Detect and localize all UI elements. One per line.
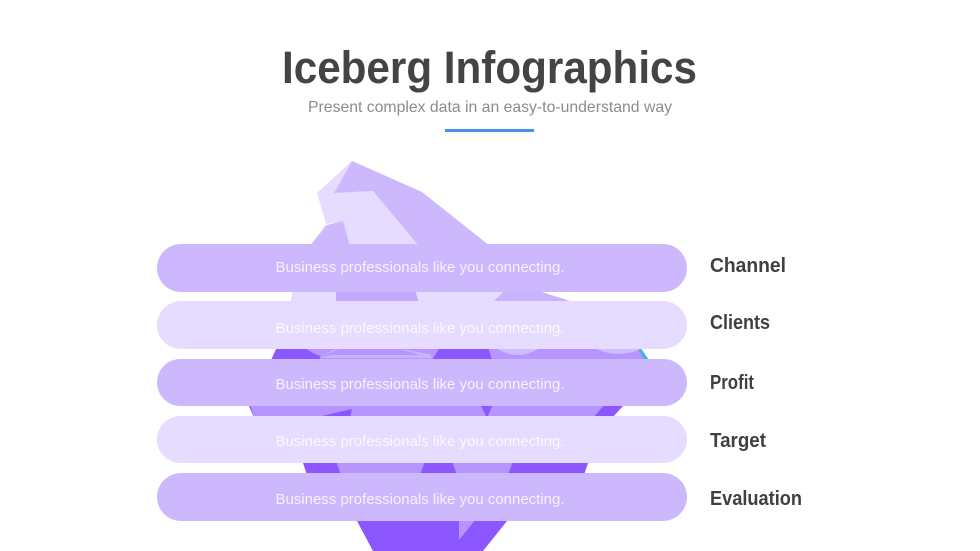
iceberg tip: light facet <box>317 161 420 246</box>
bottom small facet <box>459 519 476 540</box>
label: Profit: Profit <box>710 372 754 394</box>
underwater body: dark <box>249 347 644 551</box>
shoulder medium facet right <box>492 290 576 303</box>
lower medium facet left <box>336 461 425 475</box>
bar: Channel: Business professionals like you connecting. <box>276 259 564 276</box>
bar: Profit: Business professionals like you connecting. <box>276 376 564 393</box>
mid medium band left <box>250 404 487 418</box>
subtitle: Present complex data in an easy-to-understand way <box>308 99 672 116</box>
blue water sliver <box>636 347 649 360</box>
bar: Target <box>157 416 687 463</box>
lower medium facet right <box>452 461 513 475</box>
label: Clients: Clients <box>710 312 770 334</box>
wave highlight right <box>498 349 640 355</box>
title: Iceberg Infographics <box>282 42 697 93</box>
wave highlight left <box>322 349 432 358</box>
iceberg tip: lower medium facet <box>310 221 350 246</box>
shoulder medium facet left <box>336 290 419 303</box>
iceberg illustration <box>249 161 649 551</box>
title accent line <box>445 129 534 132</box>
underwater medium band with waves <box>303 347 440 360</box>
underwater medium band right <box>488 347 644 360</box>
bar: Profit <box>157 359 687 406</box>
bar: Clients <box>157 301 687 349</box>
bar: Clients: Business professionals like you connecting. <box>276 320 564 337</box>
bar: Target: Business professionals like you connecting. <box>276 433 564 450</box>
bar: Channel <box>157 244 687 292</box>
bar: Evaluation: Business professionals like you connecting. <box>276 491 564 508</box>
iceberg tip: small light facet <box>310 224 330 246</box>
iceberg tip: medium facets <box>334 161 490 246</box>
label: Target: Target <box>710 430 766 452</box>
label: Channel: Channel <box>710 255 786 277</box>
iceberg shoulder at waterline <box>290 290 574 303</box>
bar: Evaluation <box>157 473 687 521</box>
label: Evaluation: Evaluation <box>710 488 802 510</box>
mid medium band center <box>487 404 605 418</box>
